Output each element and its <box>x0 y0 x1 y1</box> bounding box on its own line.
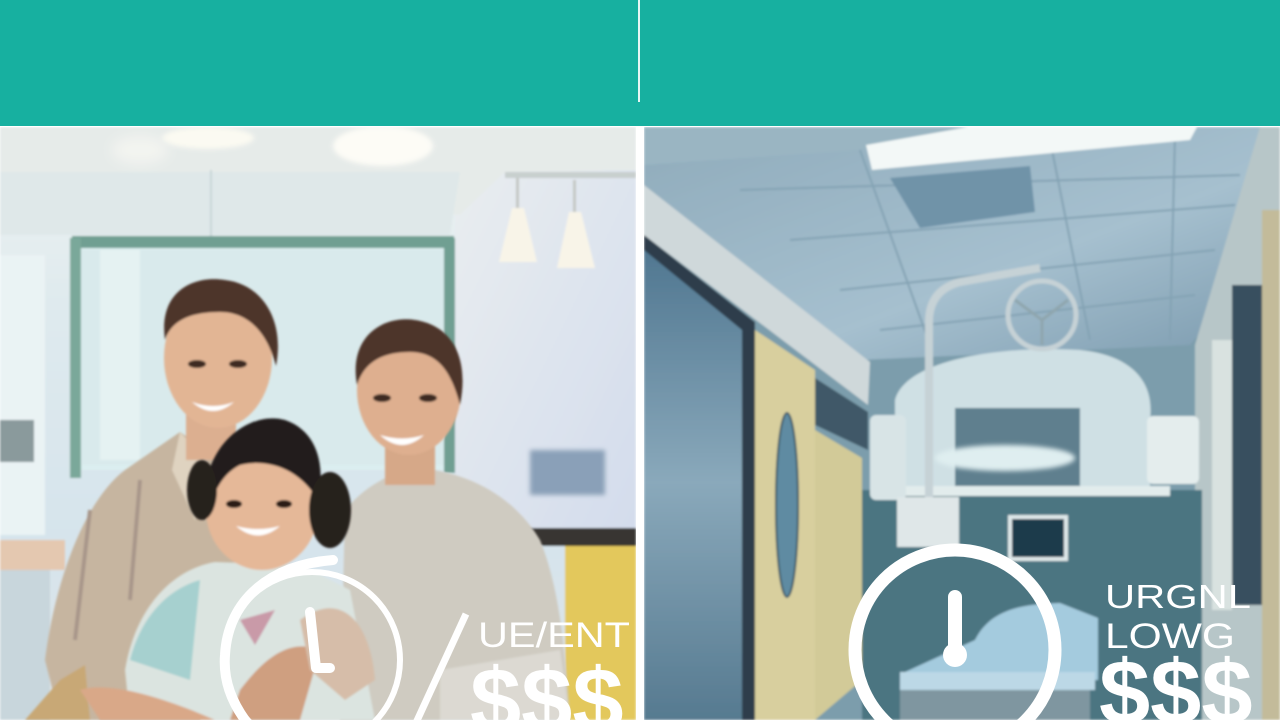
back wall right <box>564 178 636 526</box>
person: woman right <box>340 319 570 720</box>
reception detail <box>0 450 636 720</box>
person: woman left <box>25 279 278 720</box>
corridor window <box>644 245 742 720</box>
right wall <box>1195 127 1280 720</box>
back room wall <box>862 490 1202 720</box>
left wall <box>0 255 45 535</box>
monitor <box>1008 515 1068 561</box>
window frame <box>70 236 455 478</box>
label: urgent: URGNL <box>1105 578 1251 615</box>
lamp arm <box>924 264 1080 498</box>
door <box>755 330 868 720</box>
divider slash <box>415 614 466 720</box>
clinic ceiling <box>0 127 636 240</box>
header band <box>0 0 1280 126</box>
ceiling lights <box>112 126 636 268</box>
icon: round gauge <box>855 550 1055 720</box>
icon: clock with outer arc <box>224 560 400 720</box>
hospital ceiling <box>644 127 1260 405</box>
wall unit <box>897 497 959 547</box>
panel: hospital room <box>644 127 1280 720</box>
hospital bed <box>900 603 1098 720</box>
overhead machine <box>870 349 1199 500</box>
label: long: LOWG <box>1105 617 1235 656</box>
label: urgent: UE/ENT <box>478 616 630 655</box>
panel: family in clinic <box>0 126 636 720</box>
person: child <box>80 418 375 720</box>
